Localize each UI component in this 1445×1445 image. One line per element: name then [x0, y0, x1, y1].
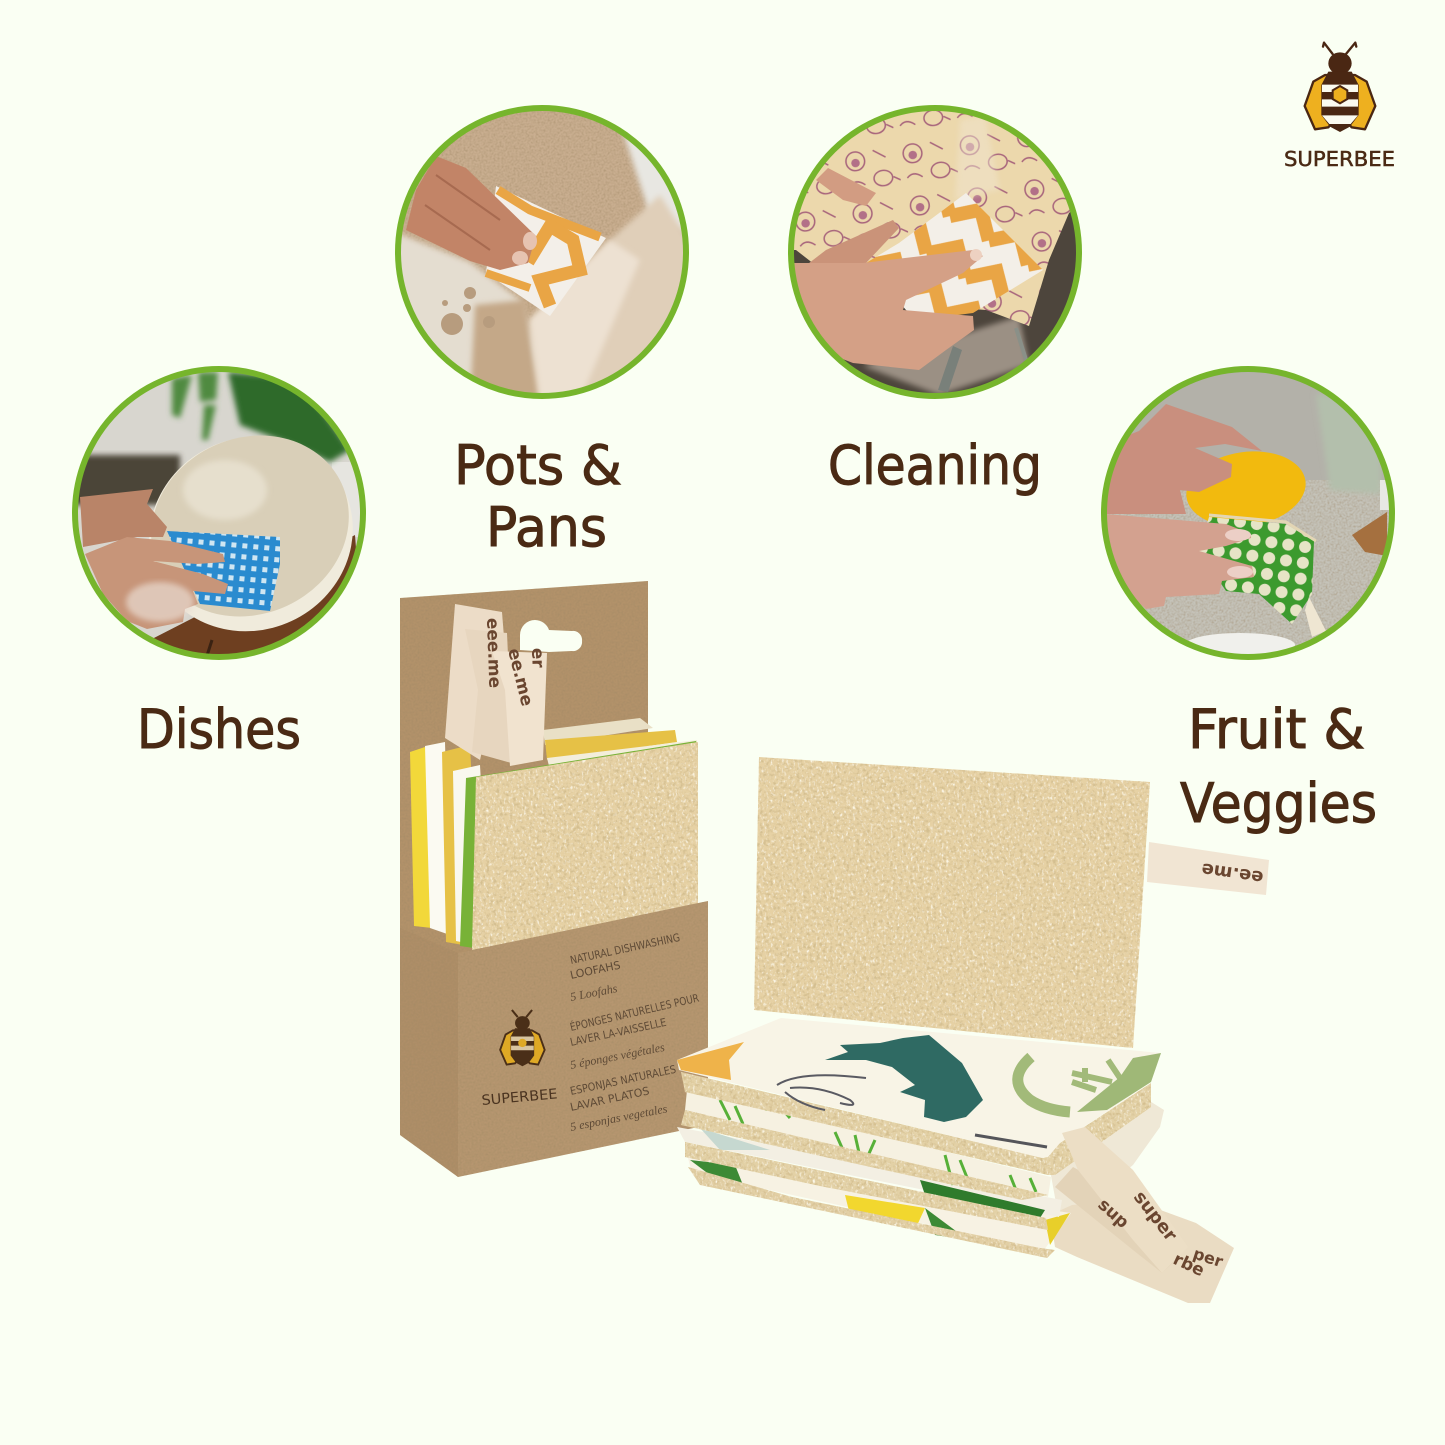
strap text — [1094, 1187, 1225, 1281]
sleeve icon: bee — [500, 1010, 545, 1066]
kraft sleeve side flap — [400, 928, 458, 1177]
heading: Pots & Pans: Pans — [486, 496, 607, 559]
back card — [400, 581, 648, 960]
sleeve multilingual text: LOOFAHS — [569, 959, 622, 982]
cotton hanging straps: eee.me — [482, 617, 504, 688]
bottom layer — [688, 1158, 1071, 1258]
back cloth edges — [1050, 1095, 1164, 1225]
heading: Dishes: Dishes — [137, 698, 301, 761]
heading: Fruit & Veggies — [1180, 698, 1377, 835]
strap text: rbe — [1170, 1249, 1207, 1281]
sleeve multilingual text: ESPONJAS NATURALES — [569, 1063, 677, 1098]
panel: pots and pans — [395, 105, 695, 559]
cotton hanging straps — [445, 604, 548, 766]
ring — [75, 369, 363, 657]
cotton hanging straps: er — [527, 647, 548, 669]
panel: cleaning — [785, 105, 1085, 497]
ring — [398, 108, 686, 396]
logo wordmark: SUPERBEE — [1284, 147, 1395, 171]
ring — [791, 108, 1079, 396]
sleeve multilingual text: LAVER LA-VAISSELLE — [569, 1016, 668, 1049]
heading: Cleaning: Cleaning — [828, 434, 1042, 497]
hanging tab — [1147, 842, 1269, 895]
heading: Pots & Pans — [454, 434, 622, 559]
tab text: ee.me — [1200, 858, 1265, 888]
sleeve multilingual text: LAVAR PLATOS — [569, 1084, 651, 1114]
heading: Fruit & Veggies: Fruit & — [1188, 698, 1365, 761]
hang slot — [520, 620, 582, 652]
product: boxed loofahs — [400, 581, 708, 1177]
second layer — [681, 1090, 1051, 1200]
panel: fruit and veggies — [1100, 365, 1400, 835]
strap text: super — [1129, 1187, 1181, 1245]
ring — [1104, 369, 1392, 657]
top loofah pad — [754, 757, 1150, 1048]
sleeve multilingual text: 5 Loofahs — [569, 981, 619, 1004]
kraft sleeve front — [458, 901, 708, 1177]
third layer — [677, 1127, 1062, 1230]
photo: washing a pan — [401, 111, 683, 393]
strap text: sup — [1094, 1195, 1133, 1233]
sleeve wordmark: SUPERBEE — [481, 1086, 558, 1109]
loofah pad — [472, 742, 698, 950]
product: stack of loofahs — [677, 757, 1269, 1303]
heading: Pots & Pans: Pots & — [454, 434, 622, 497]
icon: bee — [1305, 43, 1375, 132]
sleeve multilingual text — [569, 931, 701, 1134]
stacked cloth layers — [410, 718, 698, 948]
sleeve multilingual text: 5 éponges végétales — [569, 1040, 666, 1072]
photo: scrubbing a lemon — [1107, 372, 1389, 654]
sleeve multilingual text: ÉPONGES NATURELLES POUR — [569, 991, 701, 1034]
cotton hanging straps: ee.me — [503, 646, 537, 708]
heading: Fruit & Veggies: Veggies — [1180, 772, 1377, 835]
photo: washing a bowl — [78, 372, 360, 654]
strap text: per — [1191, 1244, 1225, 1271]
bottom strap — [1050, 1200, 1234, 1303]
front strap — [1055, 1127, 1225, 1281]
logo: Superbee — [1284, 43, 1395, 171]
photo: cleaning a beeswax wrap — [794, 111, 1076, 393]
sleeve multilingual text: 5 esponjas vegetales — [569, 1101, 669, 1134]
sleeve multilingual text: NATURAL DISHWASHING — [569, 931, 681, 967]
panel: dishes — [70, 365, 385, 761]
top cloth with animal print — [677, 1018, 1161, 1175]
